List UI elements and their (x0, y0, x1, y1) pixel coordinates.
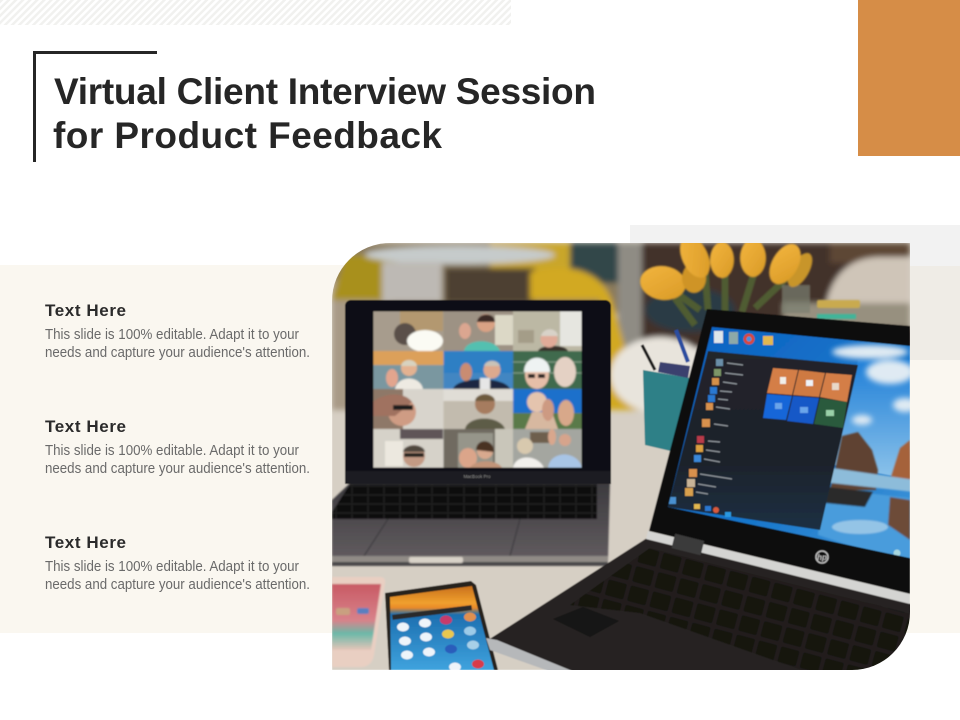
right phone (385, 581, 498, 672)
title bracket (34, 52, 157, 162)
text block 2: This slide is 100% editable. Adapt it to your (45, 443, 299, 459)
tulips (638, 232, 860, 325)
panel: grey accent block (630, 225, 960, 360)
video call grid (373, 311, 582, 468)
title: for Product Feedback (53, 115, 442, 156)
text block 2 (45, 417, 310, 477)
silver laptop (332, 300, 611, 566)
hp laptop (486, 309, 920, 680)
text block 1: Text Here (45, 301, 126, 320)
text block 2: Text Here (45, 417, 126, 436)
desktop icons (714, 331, 773, 345)
caption under screen: MacBook Pro (463, 474, 491, 479)
left phone (332, 577, 385, 667)
text block 3 (45, 533, 310, 593)
hatched top band (0, 0, 511, 25)
app list icons (685, 359, 743, 496)
taskbar icons (669, 497, 900, 556)
hp logo: hp (817, 553, 827, 562)
label sticker (553, 607, 619, 637)
panel: cream background band (0, 265, 960, 633)
blurred room background (332, 243, 910, 413)
text block 1: This slide is 100% editable. Adapt it to your (45, 327, 299, 343)
text block 1 (45, 301, 310, 361)
hp screen bezel (649, 309, 910, 594)
orange corner block (858, 0, 960, 156)
start menu tiles (763, 368, 852, 428)
text block 2: needs and capture your audience's attention. (45, 461, 310, 477)
teal pen cup (642, 330, 690, 452)
text block 3: needs and capture your audience's attention. (45, 577, 310, 593)
title: Virtual Client Interview Session (54, 71, 596, 112)
text block 3: This slide is 100% editable. Adapt it to your (45, 559, 299, 575)
laptop base (332, 483, 610, 566)
text block 1: needs and capture your audience's attention. (45, 345, 310, 361)
start menu (668, 351, 858, 530)
hp logo (816, 551, 828, 563)
laptop screen bezel (345, 300, 611, 484)
title (53, 71, 596, 156)
text block 3: Text Here (45, 533, 126, 552)
hp display (667, 326, 910, 559)
hp keyboard deck (488, 538, 920, 680)
photo: video call on laptops (332, 232, 920, 680)
